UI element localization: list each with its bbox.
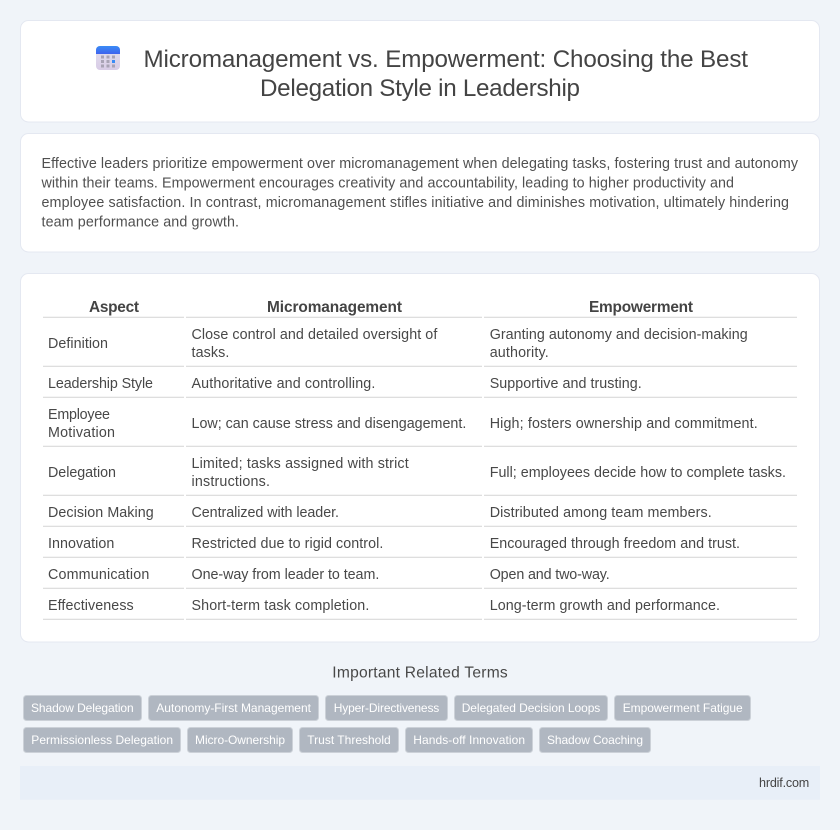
tag: hyper-directiveness (326, 696, 448, 720)
row: employee motivation (48, 407, 758, 441)
text block: introduction (40, 156, 799, 230)
row: definition (48, 327, 748, 361)
row: employee motivation: Motivation (48, 425, 115, 441)
row: employee motivation: Low; can cause stress and disengagement. (192, 416, 466, 432)
row: definition: Granting autonomy and decision-making (490, 327, 748, 343)
tag: autonomy-first management: Autonomy-First Management (156, 701, 312, 715)
tag: trust threshold: Trust Threshold (307, 733, 391, 747)
text block: introduction: employee satisfaction. In contrast, micromanagement stifles initiative and diminishes motivation, ultimately hindering (42, 195, 789, 211)
row: innovation: Innovation (48, 536, 114, 552)
row: employee motivation: Employee (48, 407, 110, 423)
tag: shadow coaching: Shadow Coaching (547, 733, 643, 747)
row: effectiveness: Effectiveness (48, 598, 134, 614)
row: delegation (48, 456, 786, 490)
title: Micromanagement vs. Empowerment: Choosing the Best (144, 46, 748, 73)
title (144, 46, 748, 102)
row: communication: Open and two-way. (490, 567, 610, 583)
tag: micro-ownership: Micro-Ownership (195, 733, 285, 747)
panel: introduction (20, 134, 820, 252)
row: innovation: Restricted due to rigid control. (192, 536, 383, 552)
panel: comparison table (20, 274, 820, 642)
tag: empowerment fatigue: Empowerment Fatigue (623, 701, 743, 715)
text block: introduction: team performance and growth. (42, 214, 239, 230)
row: employee motivation: High; fosters ownership and commitment. (490, 416, 758, 432)
row: leadership style (48, 376, 642, 392)
tag: empowerment fatigue (614, 696, 750, 720)
tag: micro-ownership (188, 728, 292, 752)
tag: permissionless delegation (24, 728, 180, 752)
row: communication: Communication (48, 567, 149, 583)
row: communication: One-way from leader to team. (192, 567, 379, 583)
heading: important related terms: Important Related Terms (332, 665, 508, 682)
tag: delegated decision loops: Delegated Decision Loops (462, 701, 600, 715)
tag list: related terms (24, 696, 750, 752)
row: effectiveness: Long-term growth and performance. (490, 598, 720, 614)
icon: calendar (96, 46, 120, 70)
row: delegation: Full; employees decide how to complete tasks. (490, 465, 786, 481)
row: definition: tasks. (192, 345, 229, 361)
tag: delegated decision loops (454, 696, 608, 720)
row: definition: Definition (48, 336, 108, 352)
tag: shadow coaching (540, 728, 650, 752)
row: delegation: Limited; tasks assigned with strict (192, 456, 409, 472)
panel: header (20, 20, 820, 122)
tag: shadow delegation: Shadow Delegation (31, 701, 134, 715)
footer (20, 766, 820, 800)
tag: shadow delegation (24, 696, 142, 720)
text block: introduction: within their teams. Empowerment encourages creativity and accountability, leading to higher productivity and (40, 176, 734, 192)
row: leadership style: Supportive and trusting. (490, 376, 642, 392)
row: definition: Close control and detailed oversight of (192, 327, 437, 343)
row: communication (48, 567, 610, 583)
tag: autonomy-first management (148, 696, 318, 720)
row: leadership style: Leadership Style (48, 376, 153, 392)
row: definition: authority. (490, 345, 549, 361)
row: delegation: instructions. (192, 474, 270, 490)
row: leadership style: Authoritative and controlling. (192, 376, 375, 392)
row: decision making: Decision Making (48, 505, 154, 521)
row: decision making: Distributed among team members. (490, 505, 712, 521)
row: innovation: Encouraged through freedom and trust. (490, 536, 740, 552)
text block: introduction: Effective leaders prioritize empowerment over micromanagement when delegating tasks, fostering trust and autonomy (42, 156, 799, 172)
tag: hyper-directiveness: Hyper-Directiveness (334, 701, 439, 715)
title: Delegation Style in Leadership (260, 75, 580, 102)
tag: hands-off innovation: Hands-off Innovation (413, 733, 525, 747)
table header row: Empowerment (589, 299, 693, 316)
row: effectiveness: Short-term task completion. (192, 598, 369, 614)
table header row: Micromanagement (267, 299, 402, 316)
tag: trust threshold (300, 728, 398, 752)
row: innovation (48, 536, 740, 552)
row: decision making: Centralized with leader. (192, 505, 339, 521)
tag: permissionless delegation: Permissionless Delegation (31, 733, 173, 747)
table header row: Aspect (89, 299, 139, 316)
table header row (89, 299, 693, 316)
tag: hands-off innovation (406, 728, 532, 752)
footer source text: hrdif.com (759, 776, 809, 790)
row: effectiveness (48, 598, 720, 614)
row: decision making (48, 505, 712, 521)
row: delegation: Delegation (48, 465, 116, 481)
